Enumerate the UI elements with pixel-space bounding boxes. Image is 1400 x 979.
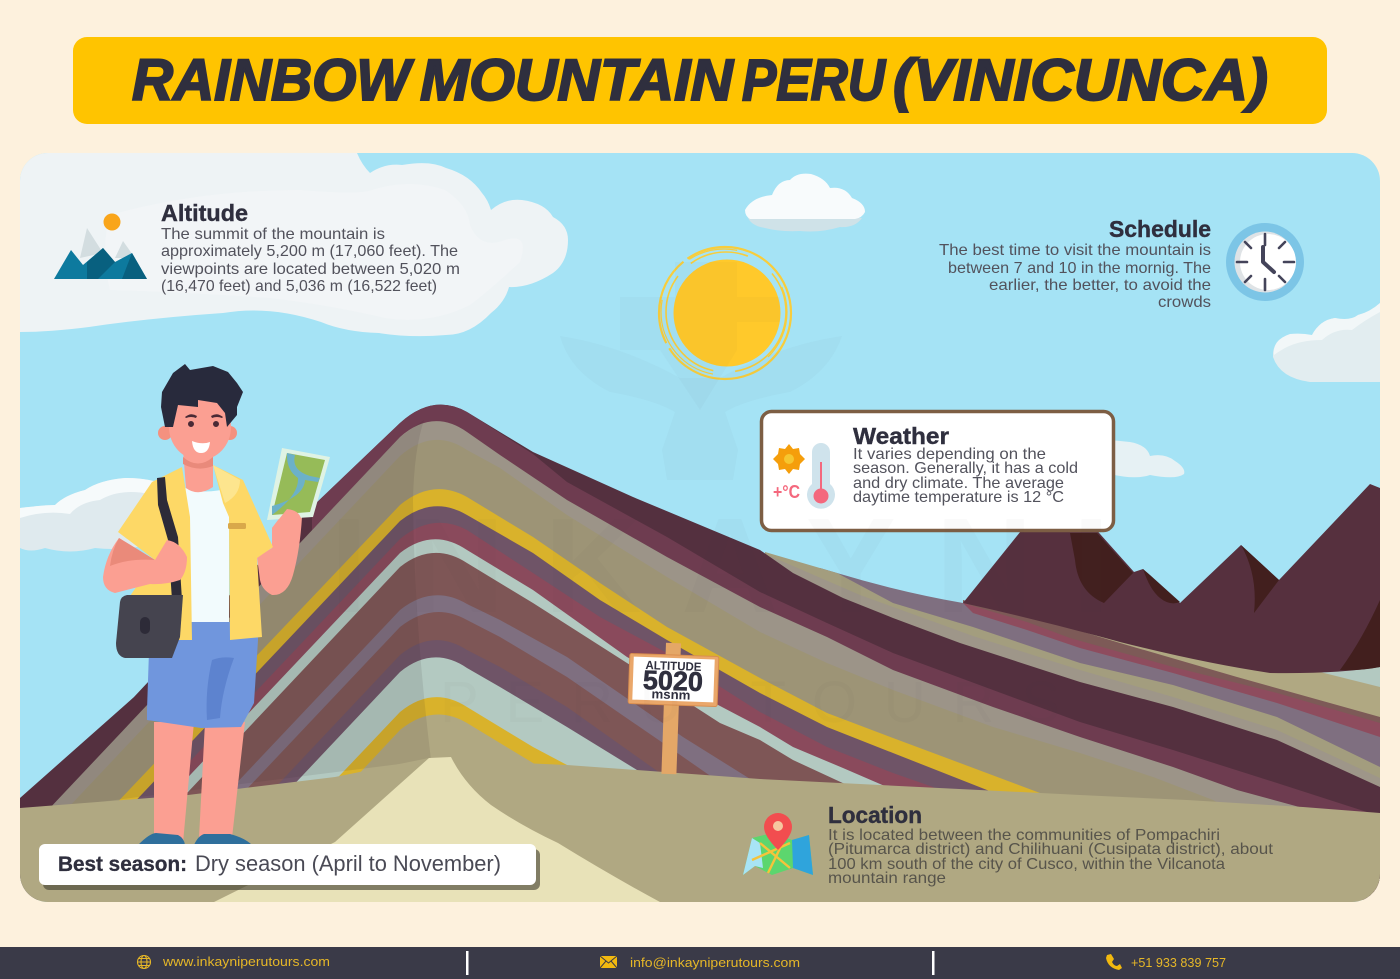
faint watermark: PERU TOURS bbox=[440, 670, 1060, 735]
back stripes: mauve bbox=[820, 568, 1380, 767]
title: MOUNTAIN bbox=[420, 48, 734, 113]
stratum: lower olive bbox=[360, 714, 534, 772]
icon: map pin bbox=[743, 813, 813, 875]
stratum: lower brown bbox=[248, 612, 710, 788]
altitude text: approximately 5,200 m (17,060 feet). The bbox=[161, 243, 458, 260]
cloud: small top centre bbox=[745, 174, 865, 232]
right jacket panel bbox=[213, 465, 273, 640]
stratum: lower dusky mauve bbox=[279, 640, 658, 784]
weather heading: Weather bbox=[853, 423, 949, 449]
shoes bbox=[138, 833, 252, 845]
icon: mountains bbox=[54, 214, 147, 279]
sign board bbox=[628, 653, 719, 707]
weather text bbox=[853, 446, 1078, 506]
right arm bbox=[257, 508, 302, 595]
traveller bbox=[103, 364, 330, 845]
weather text: and dry climate. The average bbox=[853, 475, 1064, 492]
jacket pocket tag bbox=[228, 523, 246, 529]
stratum: brown bbox=[187, 552, 844, 795]
schedule text bbox=[939, 242, 1211, 311]
icon: thermometer bbox=[807, 443, 835, 509]
location block bbox=[743, 802, 1274, 887]
strap bbox=[157, 477, 182, 600]
cloud: large top-left bbox=[20, 153, 568, 336]
bag bbox=[116, 595, 183, 658]
bag clasp bbox=[140, 617, 150, 634]
panel: main scene bbox=[20, 153, 1380, 902]
ears bbox=[158, 426, 237, 440]
best season bar bbox=[39, 844, 540, 890]
sun bbox=[659, 247, 791, 379]
map hand bbox=[272, 509, 301, 555]
location text bbox=[828, 827, 1274, 887]
location text: mountain range bbox=[828, 870, 946, 887]
sign board: ALTITUDE bbox=[645, 658, 702, 674]
shorts bbox=[147, 622, 258, 728]
schedule text: crowds bbox=[1158, 294, 1211, 311]
stratum: dark plum bbox=[20, 405, 1380, 900]
cloud: left behind traveller bbox=[20, 478, 165, 552]
back mountains bbox=[963, 470, 1380, 673]
weather text: daytime temperature is 12 °C bbox=[853, 489, 1064, 506]
shorts fold bbox=[207, 657, 234, 720]
schedule heading: Schedule bbox=[1109, 216, 1211, 242]
back stripes: olive bbox=[765, 552, 1380, 778]
schedule text: The best time to visit the mountain is bbox=[939, 242, 1211, 259]
icon: clock bbox=[1226, 223, 1304, 301]
icon: sun bbox=[773, 444, 805, 474]
title: (VINICUNCA) bbox=[893, 48, 1268, 113]
neck bbox=[183, 450, 213, 492]
stratum: olive bbox=[72, 440, 1216, 804]
best season value: Dry season (April to November) bbox=[195, 851, 501, 876]
sign board: msnm bbox=[651, 686, 691, 703]
white shirt bbox=[185, 488, 229, 622]
back stripes: grey bbox=[770, 556, 1380, 787]
altitude text bbox=[161, 226, 460, 295]
best season label: Best season: bbox=[58, 853, 187, 876]
stratum: mauve bbox=[238, 595, 749, 789]
back stripes: red bbox=[960, 603, 1380, 900]
ground bbox=[20, 757, 1380, 902]
hair bbox=[161, 364, 243, 427]
footer: website: www.inkayniperutours.com bbox=[162, 954, 330, 969]
schedule text: earlier, the better, to avoid the bbox=[989, 277, 1211, 294]
back stripes: brown red bbox=[963, 600, 1380, 723]
title banner bbox=[73, 37, 1327, 124]
altitude block bbox=[54, 200, 460, 295]
eyes and brows bbox=[185, 414, 223, 427]
weather box bbox=[762, 412, 1114, 530]
altitude text: viewpoints are located between 5,020 m bbox=[161, 261, 460, 278]
schedule block bbox=[939, 216, 1304, 311]
location heading: Location bbox=[828, 802, 922, 828]
divider bbox=[466, 951, 468, 975]
rainbow mountain: coloured strata bbox=[20, 405, 1380, 900]
cloud: behind weather box bbox=[1110, 440, 1184, 477]
stratum: yellow bbox=[119, 489, 1040, 800]
stratum: dusky mauve bbox=[138, 506, 988, 799]
stratum: lower sage bbox=[296, 657, 637, 782]
location text: (Pitumarca district) and Chilihuani (Cusipata district), about bbox=[828, 841, 1274, 858]
left arm bbox=[103, 538, 187, 593]
schedule text: between 7 and 10 in the mornig. The bbox=[948, 260, 1211, 277]
stratum: red bbox=[189, 522, 934, 788]
stratum: sage bbox=[188, 539, 884, 792]
location text: It is located between the communities of Pompachiri bbox=[828, 827, 1220, 844]
upper arm shade bbox=[110, 538, 155, 566]
sky bbox=[20, 153, 1380, 902]
faint watermark bbox=[330, 262, 1110, 735]
neck shadow bbox=[183, 457, 213, 469]
sign board: 5020 bbox=[642, 665, 703, 697]
sand path bbox=[214, 757, 660, 902]
location text: 100 km south of the city of Cusco, within the Vilcanota bbox=[828, 856, 1225, 873]
title bbox=[132, 48, 1268, 113]
altitude text: (16,470 feet) and 5,036 m (16,522 feet) bbox=[161, 278, 437, 295]
back stripes: tan bbox=[1084, 632, 1380, 717]
weather text: It varies depending on the bbox=[853, 446, 1046, 463]
back stripes: pale sage bbox=[1322, 667, 1380, 687]
footer bar bbox=[0, 947, 1400, 979]
altitude text: The summit of the mountain is bbox=[161, 226, 385, 243]
stratum: plum bbox=[312, 405, 1380, 900]
legs bbox=[154, 722, 245, 843]
icon: plus degrees: +°C bbox=[773, 482, 800, 502]
title: RAINBOW bbox=[132, 48, 414, 113]
weather text: season. Generally, it has a cold bbox=[853, 460, 1078, 477]
shaded left face of the mountain bbox=[52, 423, 430, 806]
face bbox=[169, 394, 231, 460]
footer: email: info@inkayniperutours.com bbox=[630, 955, 800, 970]
jacket collar light bbox=[213, 465, 240, 503]
divider bbox=[932, 951, 934, 975]
faint watermark: INKAYNI bbox=[330, 490, 1110, 641]
title: PERU bbox=[742, 48, 887, 113]
stratum: lower yellow bbox=[339, 697, 567, 776]
stratum: grey bbox=[48, 421, 1380, 900]
footer: phone: +51 933 839 757 bbox=[1131, 955, 1226, 970]
signpost bbox=[628, 643, 719, 774]
altitude heading: Altitude bbox=[161, 200, 248, 226]
map in hand bbox=[267, 448, 330, 520]
cloud: right edge bbox=[1273, 303, 1380, 382]
smile bbox=[192, 441, 210, 453]
left jacket panel bbox=[118, 467, 192, 640]
